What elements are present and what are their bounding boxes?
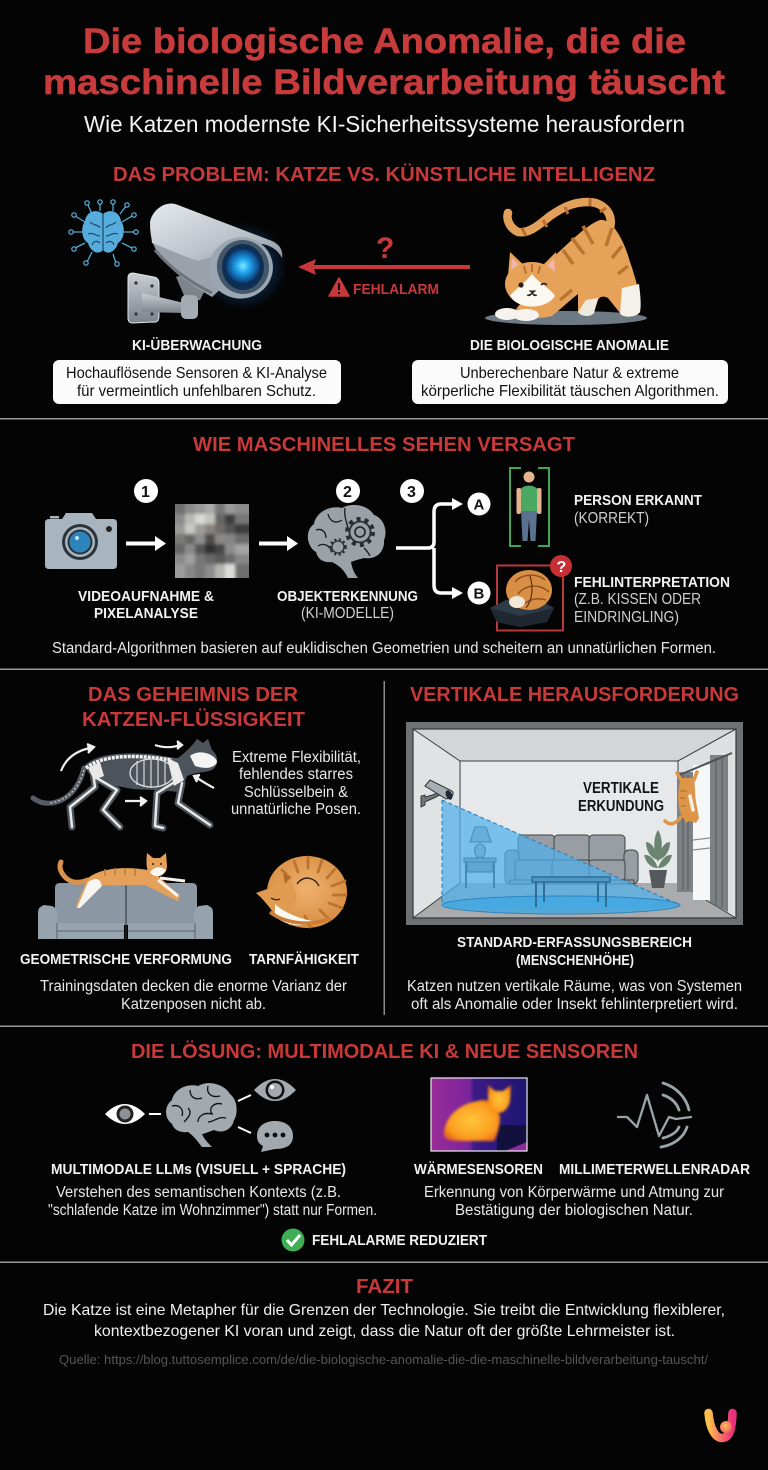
heading: cat liquid: DAS GEHEIMNIS DER <box>88 683 298 706</box>
connector lines <box>238 1095 251 1133</box>
heading: cat liquid <box>82 683 305 731</box>
heading: machine vision: WIE MASCHINELLES SEHEN VERSAGT <box>193 433 575 456</box>
window and curtains <box>677 753 732 912</box>
label: object detection: OBJEKTERKENNUNG <box>277 588 418 605</box>
text: flexibility: fehlendes starres <box>239 766 353 783</box>
panel: solution <box>48 1040 750 1252</box>
card: biological anomaly: Unberechenbare Natur & extreme <box>460 365 679 382</box>
label: geometric deformation: GEOMETRISCHE VERFORMUNG <box>20 951 232 968</box>
label: thermal sensors: WÄRMESENSOREN <box>414 1161 543 1178</box>
illustration: room with camera and cat <box>406 722 743 925</box>
text: semantic context: Verstehen des semantischen Kontexts (z.B. <box>56 1184 341 1201</box>
title <box>43 22 725 102</box>
arrow: to pixels <box>126 536 166 551</box>
question mark: ? <box>376 232 394 265</box>
icon: multimodal brain <box>166 1083 237 1147</box>
label: false alarm <box>329 278 439 298</box>
arrow: to model <box>259 536 298 551</box>
title: Die biologische Anomalie, die die <box>83 22 686 61</box>
alert: question badge: ? <box>556 559 566 576</box>
text: flexibility: Extreme Flexibilität, <box>232 749 361 766</box>
label: misinterpretation: FEHLINTERPRETATION <box>574 574 730 591</box>
heading: problem: DAS PROBLEM: KATZE VS. KÜNSTLICHE INTELLIGENZ <box>113 163 655 186</box>
card: KI monitoring <box>53 360 341 404</box>
heading: conclusion: FAZIT <box>356 1275 413 1298</box>
arrowhead B <box>452 587 463 599</box>
icon: stretching cat <box>485 198 647 325</box>
heading: cat liquid: KATZEN-FLÜSSIGKEIT <box>82 708 305 731</box>
hanging cat <box>665 772 699 824</box>
arrow: false alarm <box>298 259 470 275</box>
step badge 3 <box>400 479 424 503</box>
label: person detected <box>574 492 702 527</box>
label: KI monitoring: KI-ÜBERWACHUNG <box>132 337 262 354</box>
label: person detected: PERSON ERKANNT <box>574 492 702 509</box>
step badge 3: 3 <box>407 484 416 501</box>
coffee table <box>532 877 610 907</box>
icon: blue circuit brain <box>69 200 138 266</box>
label: reduced false alarms: FEHLALARME REDUZIERT <box>312 1232 487 1249</box>
logo <box>708 1413 732 1438</box>
label: video capture: PIXELANALYSE <box>94 605 198 622</box>
plant <box>644 830 672 888</box>
cat skeleton x-ray <box>33 739 217 828</box>
detection cone <box>442 800 680 914</box>
text: training data <box>40 978 347 1013</box>
label: misinterpretation <box>574 574 730 626</box>
text: body heat: Erkennung von Körperwärme und Atmung zur <box>424 1184 724 1201</box>
label: false alarm: FEHLALARM <box>353 281 439 298</box>
text: semantic context <box>48 1184 377 1219</box>
step badge 1: 1 <box>141 484 150 501</box>
text: standard algorithms: Standard-Algorithmen basieren auf euklidischen Geometrien und scheitern an unnatürlichen Formen. <box>52 640 716 657</box>
label: multimodal LLMs: MULTIMODALE LLMs (VISUELL + SPRACHE) <box>51 1161 346 1178</box>
label: biological anomaly: DIE BIOLOGISCHE ANOMALIE <box>470 337 669 354</box>
label: standard range: STANDARD-ERFASSUNGSBEREICH <box>457 934 692 951</box>
label: vertical exploration: ERKUNDUNG <box>578 798 664 815</box>
icon: green check <box>282 1228 304 1252</box>
title: maschinelle Bildverarbeitung täuscht <box>43 63 725 102</box>
arrow: branching result <box>396 504 453 593</box>
icon: gray eye <box>254 1079 296 1101</box>
label: camouflage: TARNFÄHIGKEIT <box>249 951 359 968</box>
text: flexibility: Schlüsselbein & <box>244 784 349 801</box>
text: training data: Katzenposen nicht ab. <box>121 996 266 1013</box>
text: semantic context: "schlafende Katze im Wohnzimmer") statt nur Formen. <box>48 1202 377 1219</box>
badge B: B <box>474 586 484 602</box>
heading: solution: DIE LÖSUNG: MULTIMODALE KI & NEUE SENSOREN <box>131 1040 638 1063</box>
subtitle: Wie Katzen modernste KI-Sicherheitssysteme herausfordern <box>84 111 685 137</box>
panel: conclusion <box>43 1275 725 1367</box>
text: training data: Trainingsdaten decken die enorme Varianz der <box>40 978 347 995</box>
label: object detection <box>277 588 418 622</box>
card: KI monitoring: für vermeintlich unfehlbaren Schutz. <box>77 383 316 400</box>
panel: how machine vision fails <box>45 433 730 657</box>
source: Quelle: https://blog.tuttosemplice.com/de/die-biologische-anomalie-die-die-maschinelle-bildverarbeitung-tauscht/ <box>59 1352 708 1367</box>
icon: visual input eye <box>105 1104 161 1124</box>
text: flexibility: unnatürliche Posen. <box>231 801 361 818</box>
step badge 2: 2 <box>343 484 352 501</box>
icon: speech bubble <box>257 1121 293 1152</box>
icon: brain with gears <box>308 505 386 578</box>
room camera <box>421 780 454 807</box>
icon: radar wave <box>618 1083 691 1147</box>
lamp and side table <box>464 827 496 888</box>
misinterpreted cat on cushion <box>490 566 563 630</box>
label: mm-wave radar: MILLIMETERWELLENRADAR <box>559 1161 750 1178</box>
label: standard range <box>457 934 692 969</box>
panel: cat liquid secret <box>20 683 361 1013</box>
heading: vertical challenge: VERTIKALE HERAUSFORDERUNG <box>410 683 739 706</box>
text: vertical spaces: oft als Anomalie oder Insekt fehlinterpretiert wird. <box>411 996 738 1013</box>
panel: problem <box>53 163 728 404</box>
text: conclusion <box>43 1302 725 1340</box>
label: standard range: (MENSCHENHÖHE) <box>516 952 634 969</box>
panel: vertical challenge <box>406 683 743 1013</box>
badge A: A <box>474 496 484 514</box>
step badge 2 <box>336 479 360 503</box>
arrows: flexibility <box>61 741 214 806</box>
card: biological anomaly: körperliche Flexibilität täuschen Algorithmen. <box>421 383 719 400</box>
card: KI monitoring: Hochauflösende Sensoren & KI-Analyse <box>66 365 327 382</box>
text: vertical spaces: Katzen nutzen vertikale Räume, was von Systemen <box>407 978 742 995</box>
text: conclusion: kontextbezogener KI voran und zeigt, dass die Natur oft der größte Lehrmeister ist. <box>94 1323 675 1340</box>
card: biological anomaly <box>412 360 728 404</box>
illustration: curled cat <box>256 856 347 928</box>
label: video capture <box>78 588 214 622</box>
text: body heat <box>424 1184 724 1219</box>
arrowhead A <box>452 498 463 510</box>
badge A <box>468 492 490 516</box>
pixelated image <box>175 504 249 578</box>
icon: security camera <box>128 203 287 323</box>
label: video capture: VIDEOAUFNAHME & <box>78 588 214 605</box>
icon: photo camera <box>45 513 117 569</box>
badge B <box>468 582 490 604</box>
label: person detected: (KORREKT) <box>574 510 649 527</box>
text: flexibility <box>231 749 361 818</box>
label: object detection: (KI-MODELLE) <box>301 605 394 622</box>
label: vertical exploration <box>578 780 664 815</box>
label: misinterpretation: (Z.B. KISSEN ODER <box>574 591 701 608</box>
text: body heat: Bestätigung der biologischen Natur. <box>455 1202 693 1219</box>
sofa <box>505 835 638 884</box>
thermal image <box>431 1078 529 1153</box>
label: misinterpretation: EINDRINGLING) <box>574 609 679 626</box>
text: conclusion: Die Katze ist eine Metapher für die Grenzen der Technologie. Sie treibt die Entwicklung flexiblerer, <box>43 1302 725 1319</box>
label: vertical exploration: VERTIKALE <box>583 780 659 797</box>
illustration: cat on sofa <box>38 853 213 939</box>
step badge 1 <box>134 479 158 503</box>
text: vertical spaces <box>407 978 742 1013</box>
person detected <box>510 468 549 546</box>
alert: question badge <box>550 555 572 577</box>
